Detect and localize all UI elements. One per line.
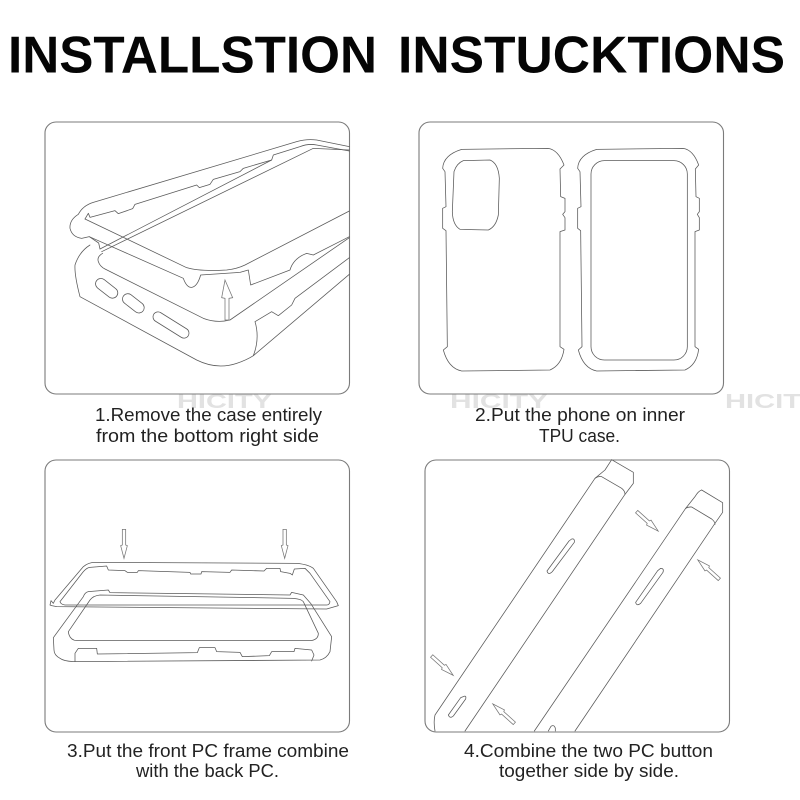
title: INSTALLSTION <box>8 26 377 84</box>
caption step 4 <box>464 741 713 781</box>
illustration: case lifted apart <box>70 140 349 366</box>
icon: up arrow <box>222 280 233 320</box>
icon: arrow bottom left <box>429 654 455 678</box>
caption step 1: from the bottom right side <box>96 426 319 446</box>
icon: down arrow left <box>121 529 127 558</box>
illustration: case back and front <box>443 148 699 371</box>
caption step 2: 2.Put the phone on inner <box>475 405 685 425</box>
icon: arrow bottom middle <box>491 701 517 726</box>
caption step 4: together side by side. <box>499 761 679 781</box>
panel: step 3 combine frames <box>45 460 350 732</box>
watermarks <box>177 391 800 413</box>
title <box>8 26 785 84</box>
caption step 1: 1.Remove the case entirely <box>95 405 322 425</box>
caption step 2 <box>475 405 685 446</box>
icon: down arrow right <box>281 529 288 558</box>
illustration: two sides of phone case <box>429 460 723 731</box>
caption step 4: 4.Combine the two PC button <box>464 741 713 761</box>
title: INSTUCKTIONS <box>398 26 785 84</box>
oval ports <box>93 276 191 340</box>
caption step 3 <box>67 741 349 781</box>
watermarks: HICITY <box>450 391 549 413</box>
caption step 2: TPU case. <box>539 426 620 446</box>
watermarks: HICIT <box>725 391 800 413</box>
illustration: frames pressed together <box>50 529 338 662</box>
panel: step 2 inner TPU case <box>419 122 724 394</box>
icon: arrow right <box>696 557 722 582</box>
caption step 1 <box>95 405 322 446</box>
icon: arrow top middle <box>634 509 660 534</box>
panel: step 4 combine PC buttons <box>425 460 730 732</box>
panel: step 1 remove case <box>45 122 350 394</box>
caption step 3: with the back PC. <box>135 761 279 781</box>
watermarks: HICITY <box>177 391 273 413</box>
caption step 3: 3.Put the front PC frame combine <box>67 741 349 761</box>
